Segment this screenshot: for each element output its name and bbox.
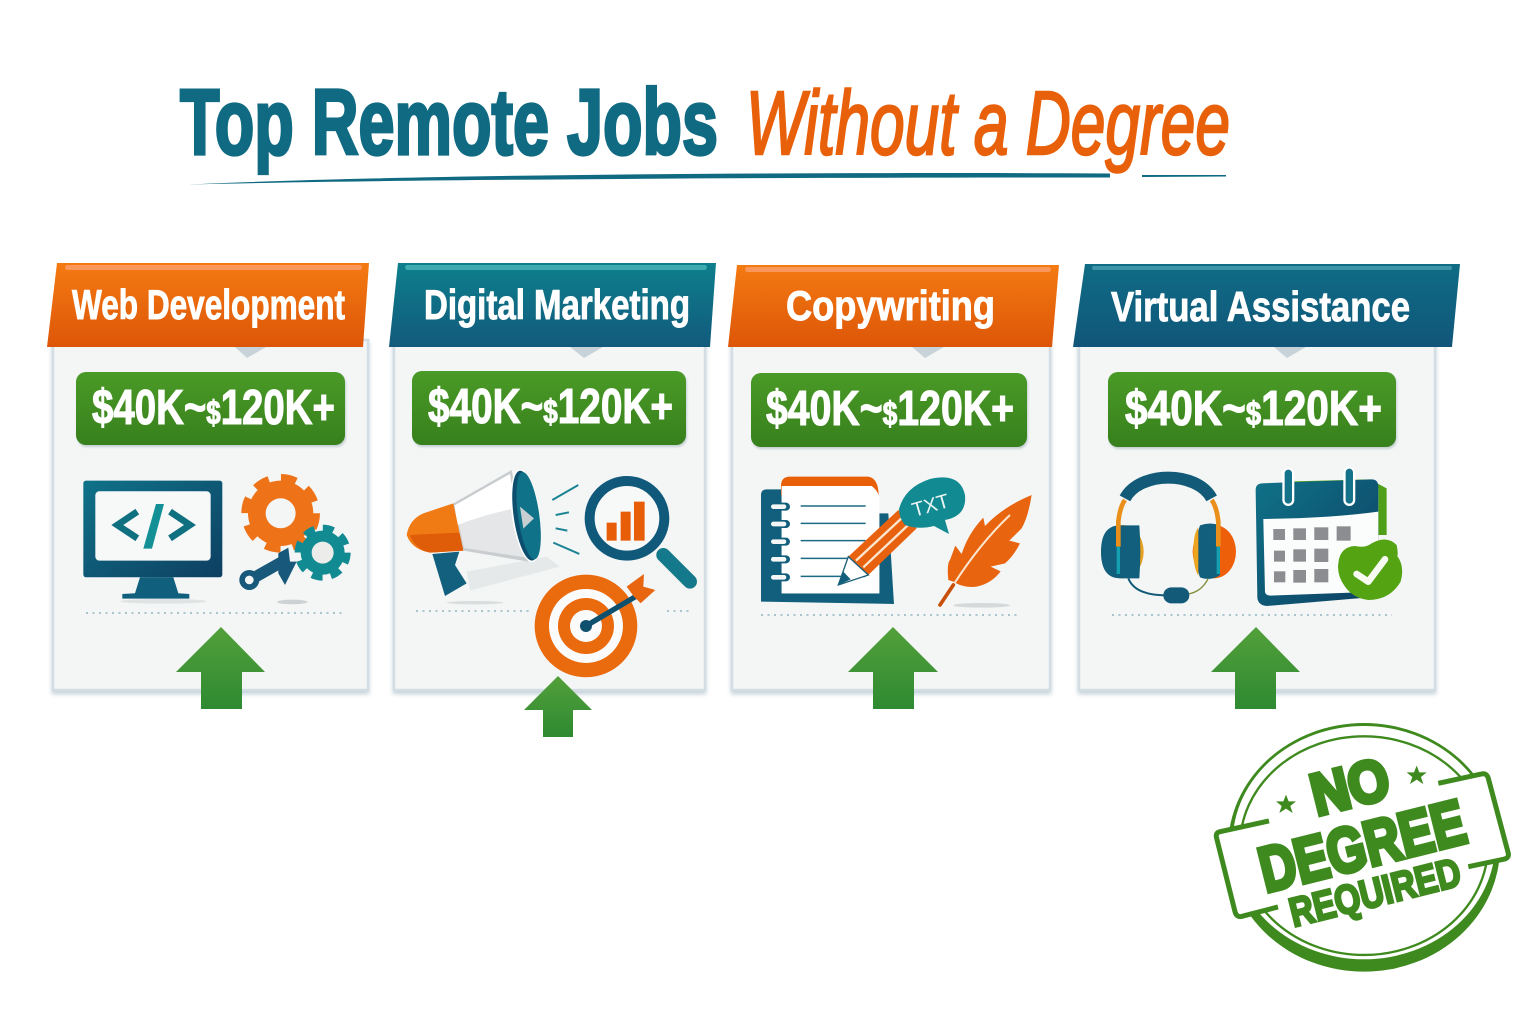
icon: magnifier chart: [590, 481, 690, 582]
icon: code monitor: [83, 481, 222, 604]
up arrow: [524, 676, 592, 737]
salary pill: $40K~$120K+: [428, 380, 673, 434]
dotted divider: [1112, 614, 1392, 616]
icon: headset: [1101, 478, 1236, 603]
up arrow: [848, 627, 938, 709]
title underline: [188, 173, 1226, 184]
icon: megaphone: [407, 467, 560, 604]
header banner: Web Development: [72, 281, 345, 328]
title: orange part: Without a Degree: [746, 74, 1230, 174]
stamp text: NO: NO: [1304, 746, 1396, 828]
up arrow: [176, 627, 265, 709]
icon: TXT speech bubble: [899, 477, 965, 534]
dotted divider: [416, 610, 690, 612]
title: dark teal part: Top Remote Jobs: [180, 70, 718, 174]
icon: gears and wrench: [239, 478, 347, 604]
icon: calendar with check: [1256, 472, 1402, 606]
stamp text: DEGREE: DEGREE: [1252, 787, 1473, 906]
salary pill: $40K~$120K+: [92, 381, 335, 435]
icon: feather: [940, 495, 1032, 608]
header banner: [1073, 264, 1460, 358]
salary pill: $40K~$120K+: [766, 382, 1014, 436]
panel body: [1079, 340, 1435, 690]
stamp outer ring: [1228, 723, 1500, 972]
card: Digital Marketing: [389, 263, 716, 737]
dotted divider: [86, 612, 345, 614]
header banner: Copywriting: [786, 282, 995, 329]
card: Virtual Assistance: [1073, 264, 1460, 709]
header banner: Digital Marketing: [424, 281, 690, 328]
stamp stars: [1276, 766, 1427, 813]
salary pill: [751, 373, 1027, 447]
up arrow: [1211, 627, 1300, 709]
salary pill: [76, 372, 345, 445]
salary pill: [1108, 372, 1396, 447]
card: Web Development: [47, 263, 369, 709]
stamp text: REQUIRED: REQUIRED: [1285, 849, 1465, 936]
panel body: [394, 340, 705, 690]
panel body: [732, 340, 1050, 690]
header banner: [389, 263, 716, 358]
icon: notebook and pencil: [761, 477, 917, 604]
salary pill: [412, 371, 686, 445]
icon: megaphone sound lines: [552, 485, 579, 554]
icon: TXT speech bubble: TXT: [910, 490, 952, 522]
salary pill: $40K~$120K+: [1125, 382, 1382, 436]
icon: target with arrow: [535, 574, 655, 677]
header banner: [728, 265, 1059, 358]
header banner: Virtual Assistance: [1111, 283, 1410, 330]
title: [180, 70, 1230, 174]
stamp: no degree required: [1215, 723, 1508, 972]
header banner: [47, 263, 369, 358]
card: Copywriting: [728, 265, 1059, 709]
dotted divider: [761, 614, 1018, 616]
panel body: [53, 340, 368, 690]
